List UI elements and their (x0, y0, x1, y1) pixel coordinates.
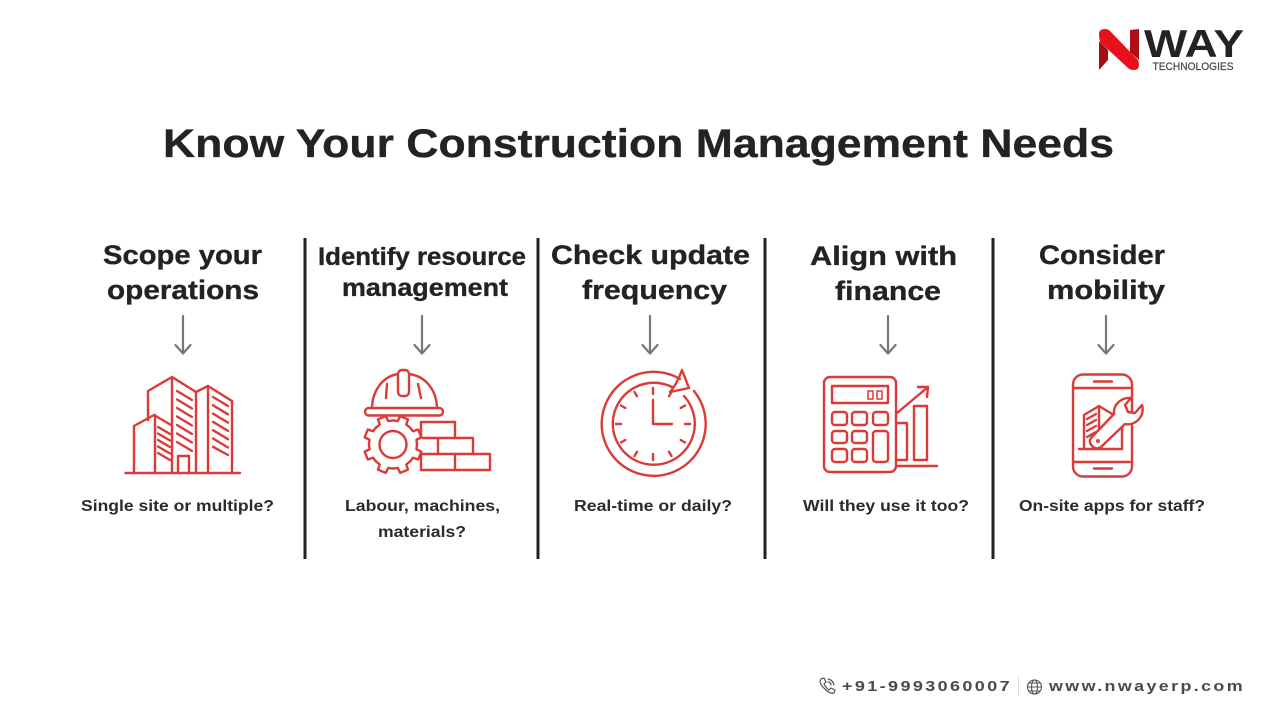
arrow (414, 316, 430, 354)
arrow (1098, 316, 1114, 354)
icon: clock with arrow (602, 370, 706, 476)
logo: NWAY Technologies (1099, 23, 1244, 73)
heading: check update frequency: frequency (582, 275, 727, 305)
heading: align with finance (810, 241, 957, 306)
title: Know Your Construction Management Needs (163, 122, 1114, 166)
divider lines (304, 238, 994, 559)
phone number: +91-9993060007 (842, 678, 1012, 695)
arrow (176, 316, 190, 354)
arrow (880, 316, 896, 354)
caption: materials? (378, 524, 466, 541)
logo: NWAY Technologies: TECHNOLOGIES (1152, 61, 1234, 73)
column 2: identify resource management (318, 243, 526, 541)
caption: Single site or multiple? (81, 498, 274, 515)
heading: align with finance: Align with (810, 241, 957, 271)
heading: scope your operations (103, 240, 263, 305)
icon: buildings (126, 377, 240, 473)
caption: Real-time or daily? (574, 498, 732, 515)
website: www.nwayerp.com (1048, 678, 1245, 695)
logo: NWAY Technologies: WAY (1144, 23, 1244, 66)
caption: On-site apps for staff? (1019, 498, 1205, 515)
heading: identify resource management: Identify resource (318, 243, 526, 271)
heading: consider mobility (1039, 240, 1166, 305)
caption: Will they use it too? (803, 498, 969, 515)
heading: identify resource management (318, 243, 526, 302)
footer contact bar (820, 676, 1245, 696)
heading: consider mobility: mobility (1047, 275, 1165, 305)
icon: phone with building and wrench (1073, 374, 1143, 476)
heading: consider mobility: Consider (1039, 240, 1166, 270)
icon: calculator and growth chart (824, 377, 937, 472)
heading: check update frequency: Check update (551, 240, 750, 270)
heading: identify resource management: management (342, 274, 509, 302)
icon: helmet, gear and bricks (363, 370, 490, 475)
heading: check update frequency (551, 240, 750, 305)
column 3: check update frequency (551, 240, 750, 515)
heading: scope your operations: Scope your (103, 240, 263, 270)
icon: globe (1028, 680, 1042, 694)
icon: phone (820, 678, 835, 693)
heading: scope your operations: operations (107, 275, 259, 305)
caption (345, 498, 500, 541)
column 4: align with finance (803, 241, 969, 515)
column 1: scope your operations (81, 240, 274, 515)
arrow (642, 316, 658, 354)
column 5: consider mobility (1019, 240, 1205, 515)
caption: Labour, machines, (345, 498, 500, 515)
heading: align with finance: finance (835, 276, 941, 306)
